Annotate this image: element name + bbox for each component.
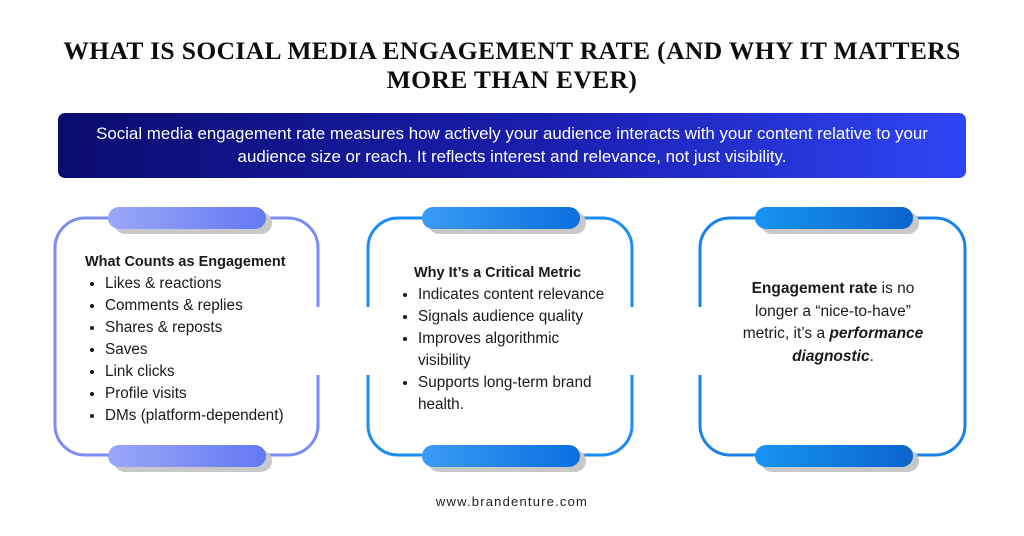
frame: right [700, 218, 965, 455]
frame: left [55, 218, 318, 455]
card: why critical [403, 265, 604, 413]
intro banner: audience size or reach. It reflects interest and relevance, not just visibility. [238, 147, 786, 166]
card: what counts: DMs (platform-dependent) [105, 407, 284, 424]
card: what counts: Likes & reactions [105, 275, 221, 292]
card: why critical: Why It’s a Critical Metric [414, 265, 581, 281]
card: what counts: Saves [105, 341, 148, 358]
intro banner: Social media engagement rate measures how actively your audience interacts with your content relative to your [96, 124, 928, 143]
card: what counts: Comments & replies [105, 297, 243, 314]
footer url: www.brandenture.com [436, 494, 588, 509]
title: WHAT IS SOCIAL MEDIA ENGAGEMENT RATE (AND WHY IT MATTERS [63, 36, 961, 65]
card: what counts: Profile visits [105, 385, 187, 402]
intro banner [58, 113, 966, 178]
frame: middle [368, 218, 632, 455]
card: why critical: Supports long-term brand health. [418, 374, 591, 413]
card: why critical: Improves algorithmic visibility [418, 330, 559, 369]
card: why critical: Indicates content relevance [418, 286, 604, 303]
pills [108, 207, 919, 472]
title: MORE THAN EVER) [387, 65, 637, 94]
card: what counts [85, 254, 286, 424]
card: what counts: Shares & reposts [105, 319, 222, 336]
title [63, 36, 961, 94]
card: what counts: What Counts as Engagement [85, 254, 286, 270]
card: why critical: Signals audience quality [418, 308, 583, 325]
card: what counts: Link clicks [105, 363, 175, 380]
card: performance diagnostic: Engagement rate is no longer a “nice-to-have” metric, it’s a performance diagnostic. [743, 280, 923, 364]
